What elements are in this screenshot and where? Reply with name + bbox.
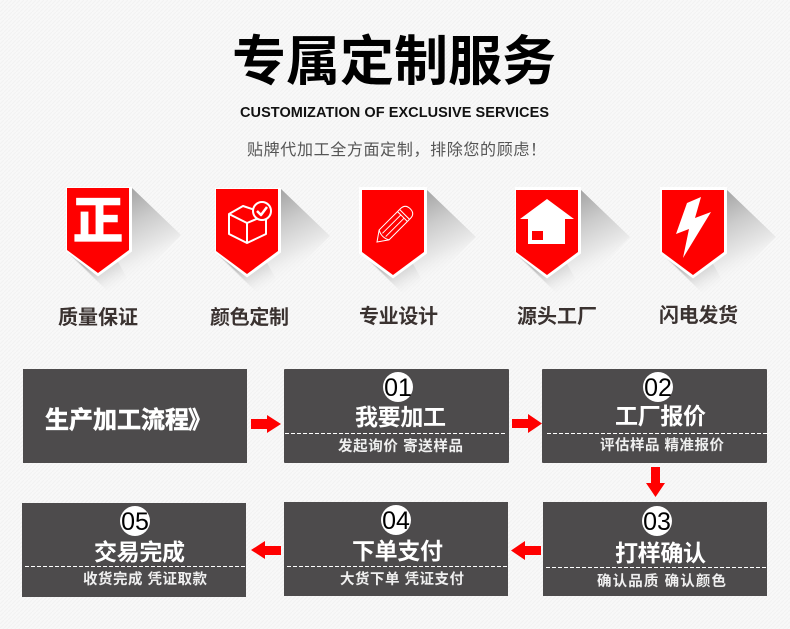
panel: step 02: 评估样品 精准报价: [600, 436, 724, 454]
panel: step 01: [284, 369, 509, 463]
label: colour: 颜色定制: [210, 305, 289, 329]
panel: step 04: 大货下单 凭证支付: [340, 570, 464, 588]
panel: step 05: 05: [121, 508, 149, 536]
panel: step 04: [284, 502, 508, 596]
feature: professional design: [359, 187, 476, 328]
panel: step 03: 打样确认: [615, 540, 706, 566]
panel: step 05: 收货完成 凭证取款: [83, 570, 208, 588]
title: 专属定制服务: [232, 32, 556, 92]
badge: quality: 正: [73, 193, 123, 249]
badge: delivery: [660, 187, 776, 302]
arrow: to step 2: [512, 414, 542, 433]
label: quality: 质量保证: [58, 306, 138, 329]
panel: step 01: 我要加工: [355, 404, 446, 430]
badge: colour: [215, 188, 330, 301]
panel: step 05: [22, 503, 246, 597]
arrow: to step 4: [511, 541, 541, 560]
feature: custom colour: [210, 188, 330, 329]
panel: step 04: 04: [382, 507, 410, 535]
label: delivery: 闪电发货: [659, 303, 738, 327]
panel: step 02: [542, 369, 767, 463]
feature: source factory: [515, 187, 630, 328]
panel: step 03: [543, 502, 767, 596]
feature: fast delivery: [659, 187, 776, 327]
panel: step 04: 下单支付: [352, 538, 443, 564]
panel: step 03: 03: [643, 508, 671, 536]
label: design: 专业设计: [359, 305, 438, 328]
label: factory: 源头工厂: [517, 305, 597, 328]
panel: step 02: 工厂报价: [615, 403, 706, 429]
badge: design: [359, 187, 476, 302]
badge: factory: [515, 187, 630, 302]
arrow: to step 5: [251, 541, 281, 559]
feature: quality assurance: [58, 187, 181, 329]
panel: step 02: 02: [644, 374, 672, 402]
panel: step 03: 确认品质 确认颜色: [597, 572, 726, 590]
panel: step 01: 01: [384, 374, 412, 402]
panel: step 01: 发起询价 寄送样品: [338, 437, 463, 455]
arrow: to step 1: [251, 415, 281, 433]
panel: step 05: 交易完成: [94, 539, 185, 565]
arrow: to step 3: [646, 467, 665, 497]
english subtitle: CUSTOMIZATION OF EXCLUSIVE SERVICES: [240, 105, 549, 121]
panel: process title: 生产加工流程》: [45, 407, 212, 434]
panel: process title: [23, 369, 247, 463]
badge: quality: [66, 187, 181, 300]
tagline: 贴牌代加工全方面定制，排除您的顾虑！: [247, 141, 546, 159]
